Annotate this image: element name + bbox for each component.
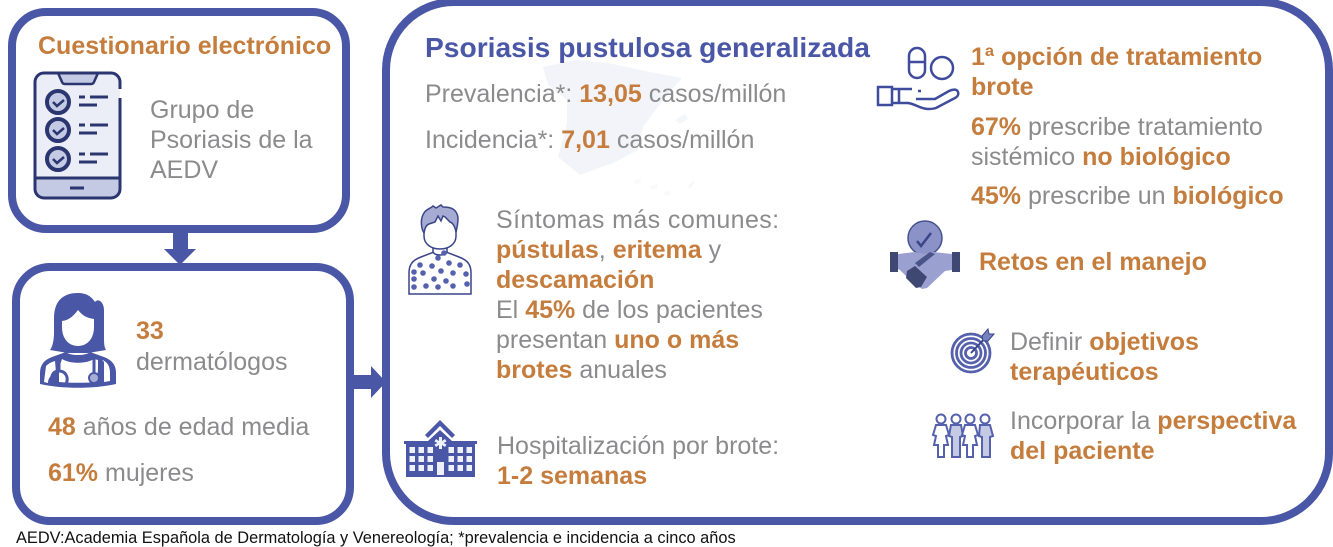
heading: main title: Psoriasis pustulosa generalizada — [425, 31, 870, 63]
text: hospitalization: Hospitalización por brote: — [497, 432, 779, 460]
text: therapeutic: terapéuticos — [1010, 358, 1159, 386]
text: psoriasis group name: Psoriasis de la — [150, 126, 313, 154]
panel: electronic questionnaire — [8, 8, 350, 233]
arrow: dermatologists to findings — [354, 366, 382, 398]
stat: weeks: 1-2 semanas — [497, 462, 647, 490]
panel: main findings frame — [382, 0, 1333, 525]
stat: number of dermatologists: 33 — [136, 317, 164, 345]
heading: management challenges: Retos en el manejo — [979, 248, 1207, 276]
text: define goals: Definir objetivos — [1010, 328, 1199, 356]
text: group: Grupo de — [150, 96, 254, 124]
text: systemic non-biologic: sistémico no biológico — [971, 143, 1231, 171]
text: incorporate perspective: Incorporar la perspectiva — [1010, 407, 1296, 435]
stat: women: 61% mujeres — [48, 459, 194, 487]
icon: group of patients — [932, 414, 994, 458]
text: annual flares: brotes anuales — [496, 356, 667, 384]
text: dermatologists: dermatólogos — [136, 348, 287, 376]
heading: first treatment option: 1ª opción de tratamiento — [971, 43, 1262, 71]
icon: pills on hand — [876, 46, 960, 110]
text: present one or more: presentan uno o más — [496, 326, 739, 354]
text: symptoms block: Síntomas más comunes: — [496, 206, 780, 234]
icon: hospital — [404, 420, 477, 477]
footnote: AEDV:Academia Española de Dermatología y Venereología; *prevalencia e incidencia a cinco años — [16, 529, 736, 547]
arrow: questionnaire to dermatologists — [164, 233, 196, 263]
stat: non-biologic prescription: 67% prescribe tratamiento — [971, 113, 1263, 141]
icon: patient with pustules — [408, 204, 472, 295]
text: of the patient: del paciente — [1010, 437, 1154, 465]
text: 45 percent of patients: El 45% de los pacientes — [496, 296, 763, 324]
panel: dermatologists — [12, 263, 354, 525]
icon: female doctor — [40, 293, 116, 388]
icon: target — [950, 328, 995, 374]
text: pustules and erythema: pústulas, eritema y — [496, 236, 721, 264]
icon: phone checklist — [34, 72, 122, 200]
stat: incidence: Incidencia*: 7,01 casos/millón — [425, 126, 754, 154]
stat: prevalence: Prevalencia*: 13,05 casos/millón — [425, 80, 786, 108]
text: scaling: descamación — [496, 266, 654, 294]
icon: handshake with check — [890, 220, 960, 289]
stat: mean age: 48 años de edad media — [48, 413, 309, 441]
heading: flare: brote — [971, 73, 1034, 101]
text: AEDV: AEDV — [150, 156, 218, 184]
stat: biologic prescription: 45% prescribe un biológico — [971, 182, 1284, 210]
map of Spain watermark — [543, 60, 688, 175]
heading: questionnaire: Cuestionario electrónico — [38, 32, 331, 60]
